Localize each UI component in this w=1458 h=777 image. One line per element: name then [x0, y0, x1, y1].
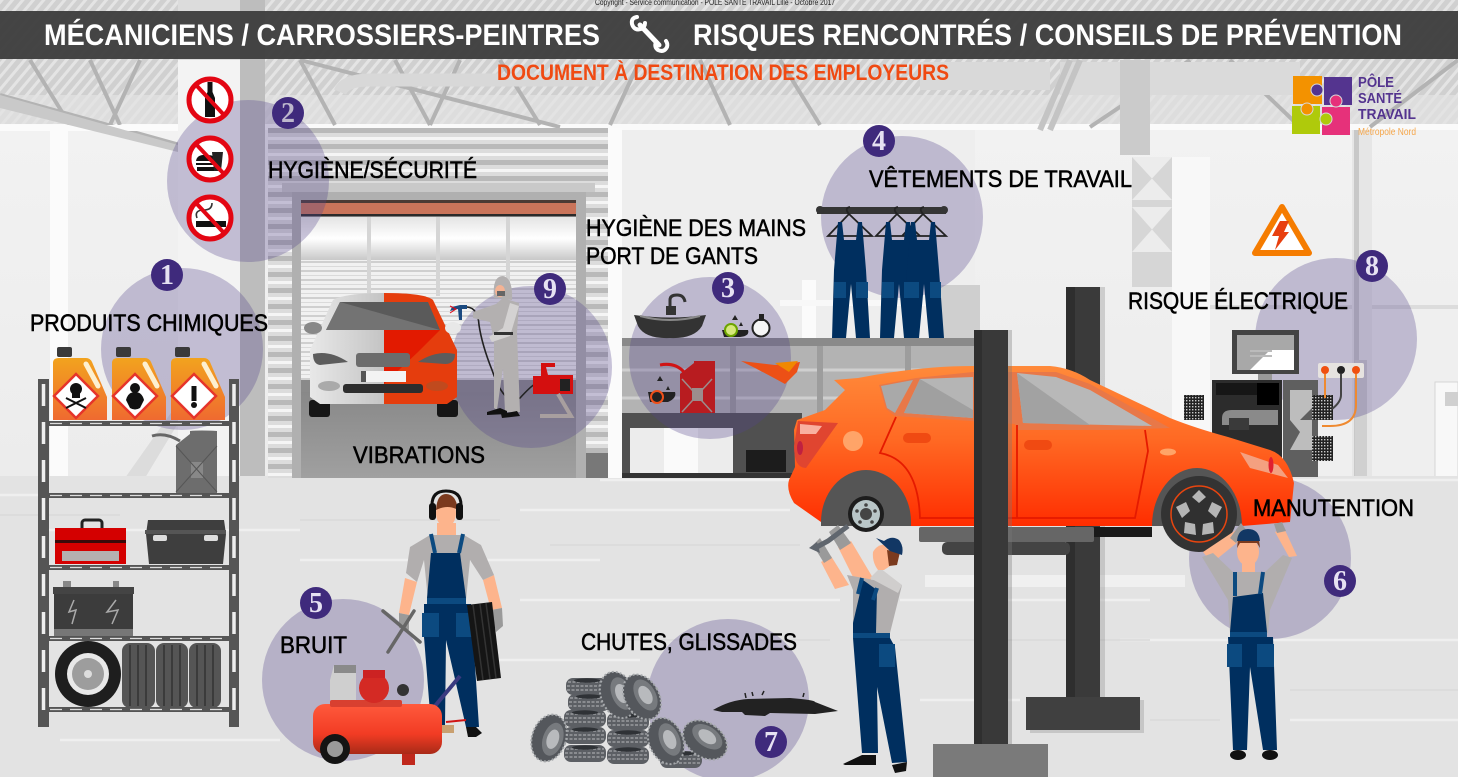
icon: electric warning triangle	[1255, 207, 1309, 253]
badge 9	[534, 273, 566, 305]
badge 2: 2	[281, 98, 295, 129]
badge 5	[300, 587, 332, 619]
icon: clean hand check	[722, 315, 748, 337]
badge 7: 7	[764, 727, 778, 758]
badge 7	[755, 726, 787, 758]
rear lift column	[1026, 287, 1144, 733]
badge 3: 3	[721, 273, 735, 304]
badge 4: 4	[872, 126, 886, 157]
front wheel	[1161, 476, 1237, 552]
tyre pile	[525, 666, 734, 770]
icon: wrench	[632, 17, 667, 51]
floor	[0, 476, 1458, 777]
cross wrench	[383, 611, 420, 652]
label: 3 hygiène des mains: HYGIÈNE DES MAINS	[586, 215, 806, 242]
wheel alignment machine	[1184, 330, 1364, 477]
logo: Pôle Santé Travail: Métropole Nord	[1358, 127, 1416, 138]
storage shelf rack	[38, 347, 239, 727]
red jerrycan	[660, 361, 715, 413]
front lift column	[933, 330, 1048, 777]
panel: workshop shelf	[622, 338, 975, 478]
left wall column	[50, 130, 68, 478]
badge 1: 1	[160, 260, 174, 291]
air compressor	[313, 665, 466, 765]
badge 8: 8	[1365, 251, 1379, 282]
label: 1 produits chimiques: PRODUITS CHIMIQUES	[30, 310, 268, 337]
wall window frame near rack	[622, 130, 975, 340]
icon: dirty hand crossed	[648, 376, 675, 403]
badge 4	[863, 125, 895, 157]
label: 7 chutes glissades: CHUTES, GLISSADES	[581, 629, 797, 656]
label: 8 risque électrique: RISQUE ÉLECTRIQUE	[1128, 288, 1348, 315]
badge 9: 9	[543, 274, 557, 305]
label: 9 vibrations: VIBRATIONS	[353, 442, 485, 469]
icon: no food sign	[189, 138, 231, 180]
logo: Pôle Santé Travail: TRAVAIL	[1358, 106, 1416, 123]
orange car on lift	[788, 366, 1294, 555]
orange chemical jugs	[53, 347, 225, 420]
title right: RISQUES RENCONTRÉS / CONSEILS DE PRÉVENTION	[693, 18, 1402, 52]
label: 2 hygiène sécurité: HYGIÈNE/SÉCURITÉ	[268, 157, 477, 184]
items: sink and gloves shelf	[634, 295, 800, 413]
icon: no alcohol sign	[189, 79, 231, 121]
badge 5: 5	[309, 588, 323, 619]
pillar	[178, 0, 265, 500]
numbered badges	[151, 97, 1388, 758]
spray painting car	[304, 293, 461, 417]
rear wheel hub	[848, 496, 884, 532]
car battery	[53, 581, 134, 636]
badge 6: 6	[1333, 566, 1347, 597]
hanging overalls	[832, 222, 944, 338]
logo: Pôle Santé Travail: PÔLE	[1358, 73, 1394, 91]
label: 4 vêtements de travail: VÊTEMENTS DE TRAVAIL	[869, 166, 1132, 193]
mechanic with headphones and tyre	[383, 491, 503, 737]
orange work gloves	[741, 361, 800, 384]
banner band	[0, 11, 1458, 59]
label: 6 manutention: MANUTENTION	[1253, 495, 1414, 522]
duct and right wall	[1132, 157, 1172, 287]
garage door	[268, 128, 622, 478]
title left: MÉCANICIENS / CARROSSIERS-PEINTRES	[44, 18, 600, 52]
mechanic working on wheel with wrench	[809, 525, 907, 773]
wheel and tyres	[55, 641, 221, 708]
oil puddle	[713, 691, 838, 716]
dark toolbox	[145, 520, 226, 564]
badge 8	[1356, 250, 1388, 282]
icon: hand cream bottle	[752, 314, 770, 336]
spray painter and pump	[450, 276, 573, 418]
mechanic lifting car (handling)	[1202, 522, 1297, 760]
red toolbox	[55, 520, 126, 564]
label: 5 bruit: BRUIT	[280, 632, 347, 659]
subtitle: DOCUMENT À DESTINATION DES EMPLOYEURS	[497, 60, 949, 85]
icon: no smoking sign	[189, 197, 231, 239]
section labels	[30, 157, 1414, 659]
badge 6	[1324, 565, 1356, 597]
clothes rack with overalls	[816, 206, 948, 338]
label: 3 port de gants: PORT DE GANTS	[586, 243, 758, 270]
purple highlight circles	[101, 100, 1417, 777]
badge 2	[272, 97, 304, 129]
logo: Pôle Santé Travail: SANTÉ	[1358, 90, 1402, 107]
grey jerrycan	[152, 430, 217, 493]
logo: Pôle Santé Travail	[1292, 73, 1416, 138]
badge 1	[151, 259, 183, 291]
badge 3	[712, 272, 744, 304]
